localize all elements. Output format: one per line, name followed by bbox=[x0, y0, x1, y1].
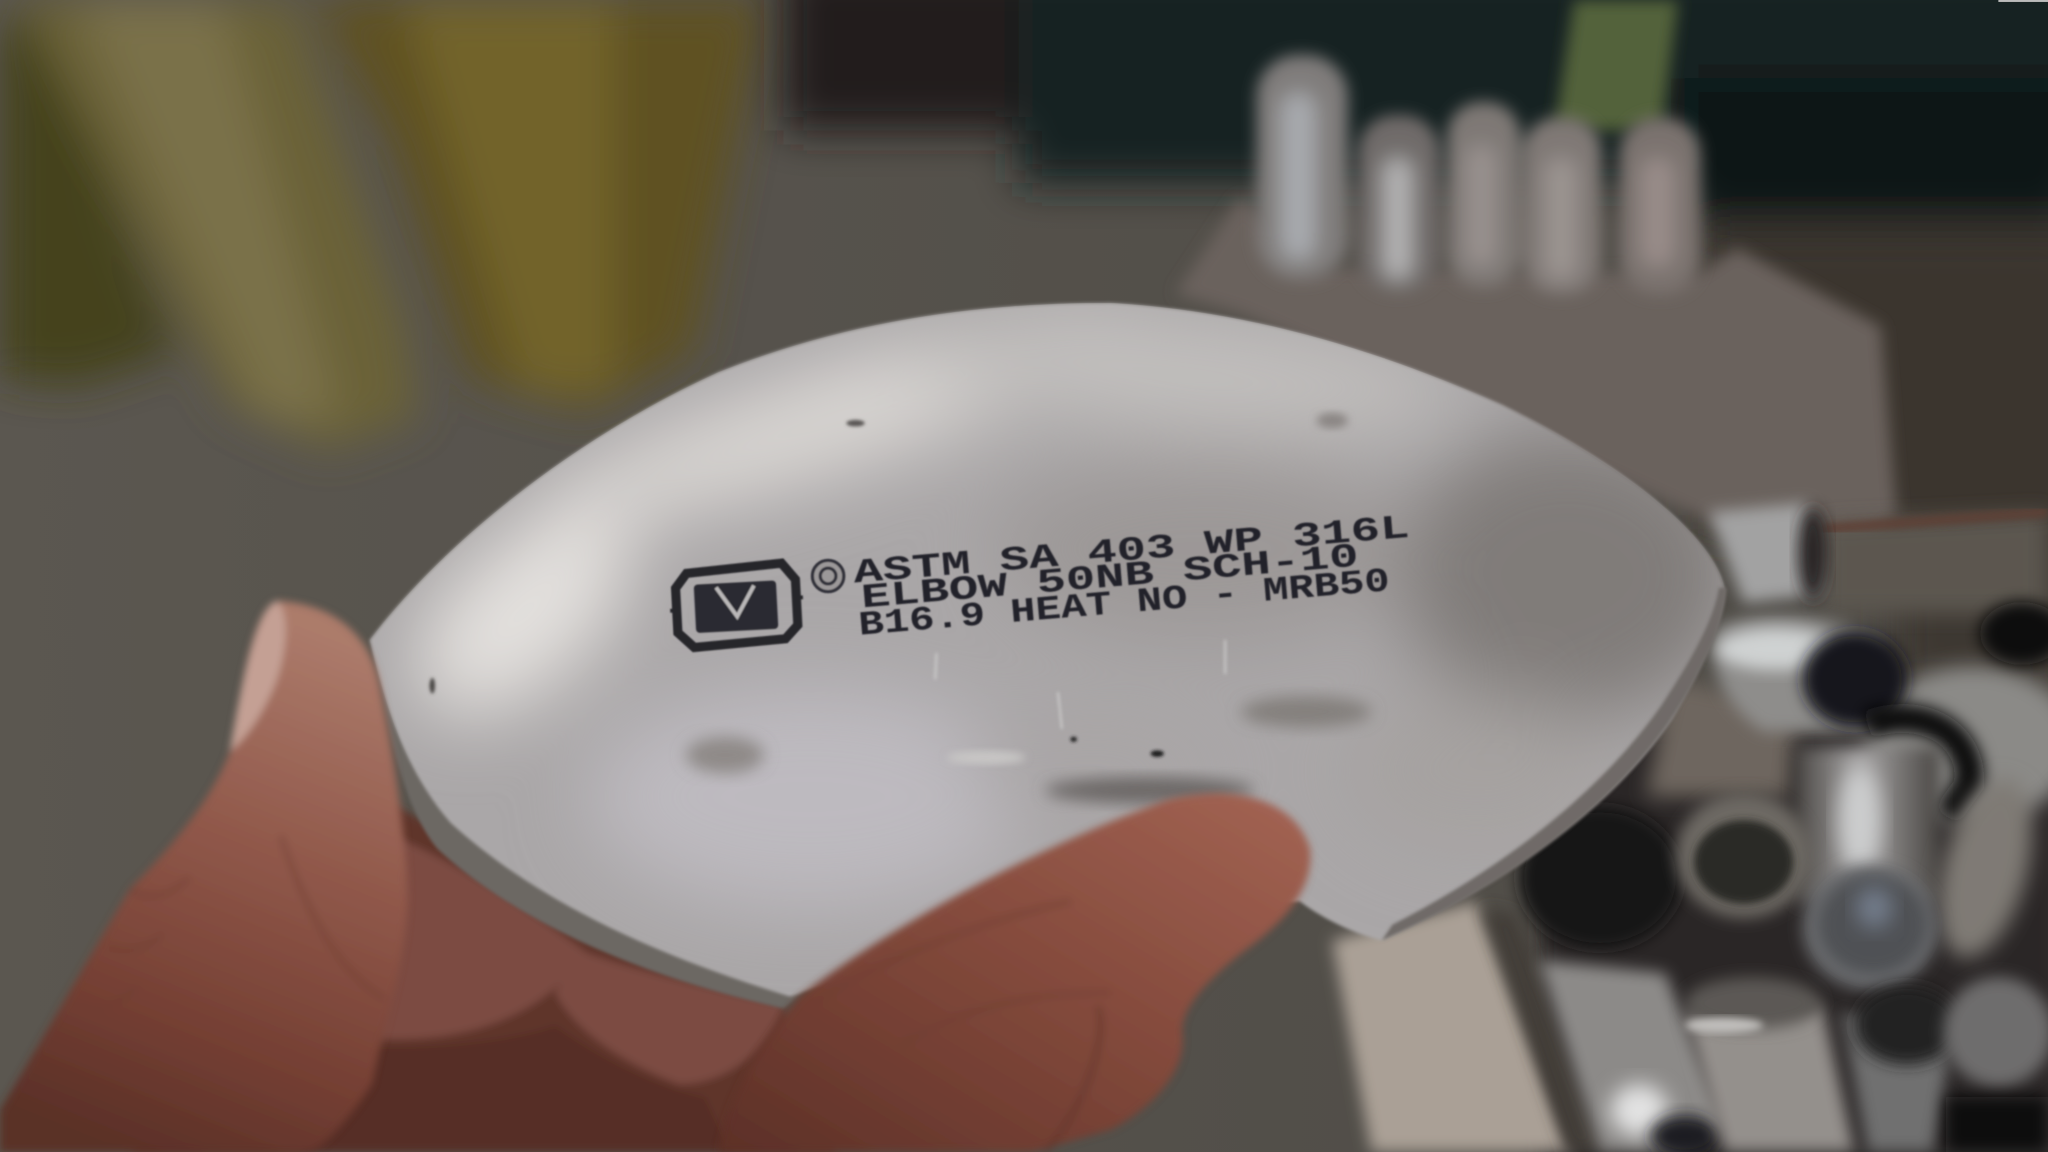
thumbnail bbox=[230, 601, 286, 751]
elbow: surface marks bbox=[430, 413, 1371, 803]
stamped marking text: ASTM SA 403 WP 316L bbox=[852, 510, 1411, 593]
maker's logo stamp bbox=[668, 562, 805, 649]
fitting body under elbow bbox=[1646, 679, 1796, 797]
elbow: stainless steel body bbox=[370, 271, 1737, 997]
stamped marking text bbox=[852, 510, 1411, 646]
knuckle creases bbox=[78, 878, 189, 1008]
stamped marking text: B16.9 HEAT NO - MRB50 bbox=[857, 563, 1391, 646]
beige pipe bbox=[1332, 901, 1574, 1152]
background: five blurred upright pipes bbox=[1256, 55, 1701, 294]
background: olive pipes at top left bbox=[0, 0, 764, 451]
background: dark object and teal wall at top bbox=[784, 0, 2048, 692]
stamped marking text: ELBOW 50NB SCH-10 bbox=[860, 539, 1360, 618]
hand: fingers behind the elbow bbox=[131, 797, 836, 1152]
ring fitting bbox=[1676, 793, 1812, 918]
large dark opening bbox=[1519, 807, 1681, 948]
certification mark bbox=[812, 560, 844, 592]
background: cloth under the pipes bbox=[1176, 196, 1896, 575]
silver fitting with dark opening bbox=[1714, 616, 1881, 731]
bowl fitting bbox=[1802, 865, 1938, 990]
lower silver fittings bbox=[1539, 960, 1724, 1152]
background: pile of blurred steel fittings at bottom right bbox=[1332, 503, 2048, 1152]
hand: large finger in front of the elbow bbox=[718, 794, 1310, 1152]
elbow: right rim bbox=[1382, 588, 1727, 940]
light fittings right bbox=[1868, 666, 2048, 823]
upper fitting with rust rod bbox=[1822, 512, 2048, 614]
background: green cylinder bbox=[1554, 0, 1678, 131]
hand: thumb bbox=[0, 601, 408, 1152]
elbow: bevelled pipe end under the body bbox=[372, 647, 803, 1008]
top edge highlight bbox=[1998, 0, 2048, 2]
upright silver fitting bbox=[1796, 747, 1940, 904]
